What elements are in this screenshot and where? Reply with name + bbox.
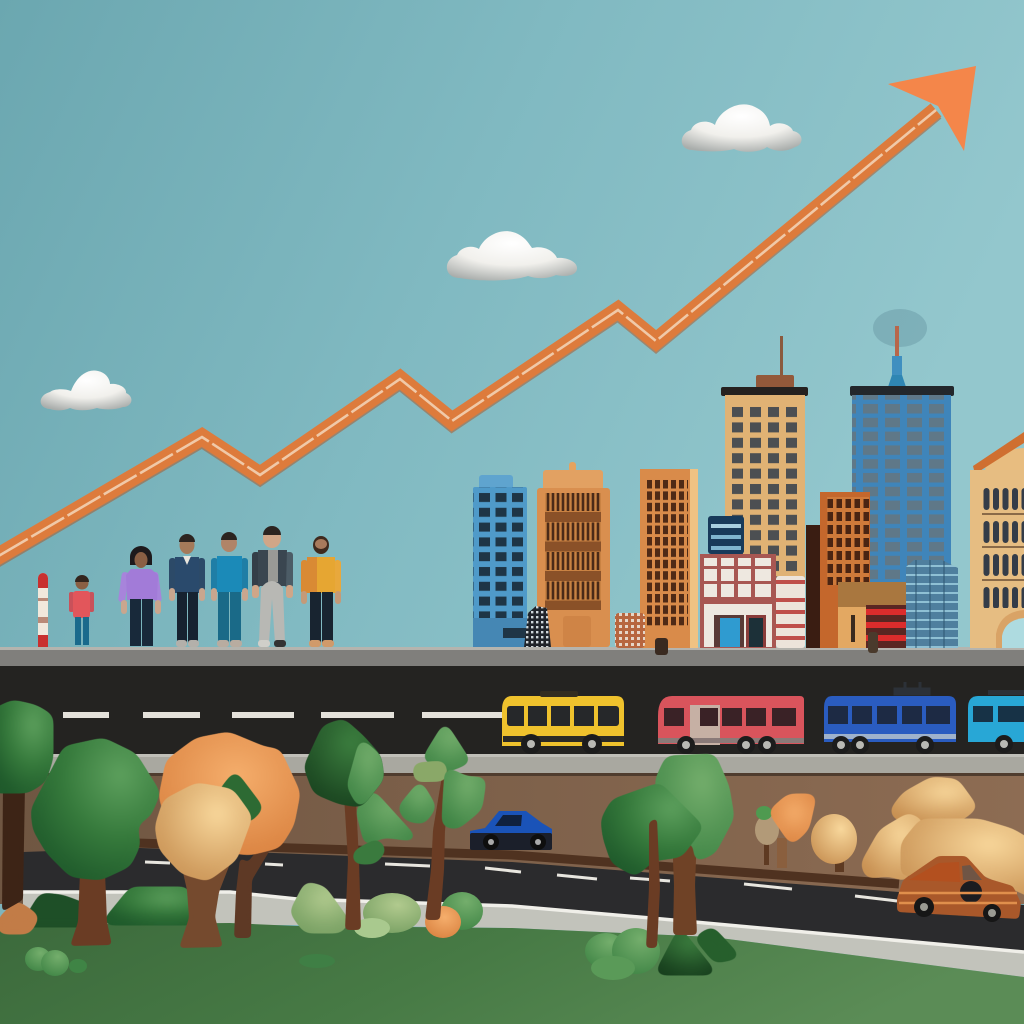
road dashes bbox=[145, 862, 897, 901]
building: glass small bbox=[906, 560, 958, 648]
building: white shop bbox=[700, 554, 776, 648]
grass bbox=[0, 923, 1024, 1024]
person: navy suit bbox=[169, 534, 205, 647]
bus: yellow bbox=[502, 691, 624, 754]
building: sign block bbox=[708, 516, 744, 554]
wall rail bbox=[137, 843, 899, 884]
city skyline bbox=[473, 309, 1024, 655]
marker pole bbox=[38, 573, 48, 647]
bus: blue bbox=[824, 682, 956, 754]
building: blue left bbox=[473, 475, 527, 647]
people group bbox=[69, 526, 341, 647]
road curb bbox=[23, 892, 1024, 977]
ground shelf bbox=[0, 647, 1024, 667]
car: orange bbox=[897, 856, 1021, 922]
arrowhead bbox=[888, 66, 976, 151]
building: tan tower bbox=[721, 336, 808, 585]
growth arrow bbox=[0, 66, 976, 560]
person: woman purple bbox=[118, 546, 162, 646]
building: blue tower with antenna bbox=[850, 309, 954, 585]
building: orange mid bbox=[806, 492, 870, 648]
small storefronts bbox=[524, 606, 878, 655]
building: cream right bbox=[970, 432, 1024, 648]
lower road bbox=[23, 843, 1024, 977]
cloud: left bbox=[41, 371, 131, 410]
building: low annex bbox=[838, 582, 906, 648]
clay mounds bbox=[864, 780, 1024, 896]
tree: center left bbox=[307, 722, 413, 930]
car: dark blue bbox=[470, 811, 552, 850]
person: yellow shirt bbox=[301, 536, 341, 647]
clay trees: background bbox=[755, 797, 857, 872]
cloud: top right bbox=[682, 104, 802, 152]
person: child bbox=[69, 575, 94, 645]
lane markings bbox=[63, 712, 504, 718]
building: orange tall bbox=[640, 469, 698, 648]
tree: far left bbox=[0, 703, 50, 912]
bus: red bbox=[658, 696, 804, 754]
tree: right bbox=[604, 757, 731, 948]
upper road bbox=[0, 666, 1024, 756]
cloud: middle bbox=[447, 231, 577, 280]
bus: cyan bbox=[968, 690, 1024, 753]
tree: big green bbox=[34, 741, 157, 946]
person: grey jacket bbox=[252, 526, 293, 647]
tree: center bbox=[401, 727, 483, 920]
building: striped cylinder bbox=[776, 576, 805, 648]
person: teal shirt bbox=[211, 532, 248, 647]
bushes bbox=[1, 885, 736, 980]
tree: orange pair bbox=[158, 735, 297, 948]
building: carved orange bbox=[537, 462, 610, 647]
retaining wall bbox=[0, 754, 1024, 904]
background sky bbox=[0, 0, 1024, 660]
